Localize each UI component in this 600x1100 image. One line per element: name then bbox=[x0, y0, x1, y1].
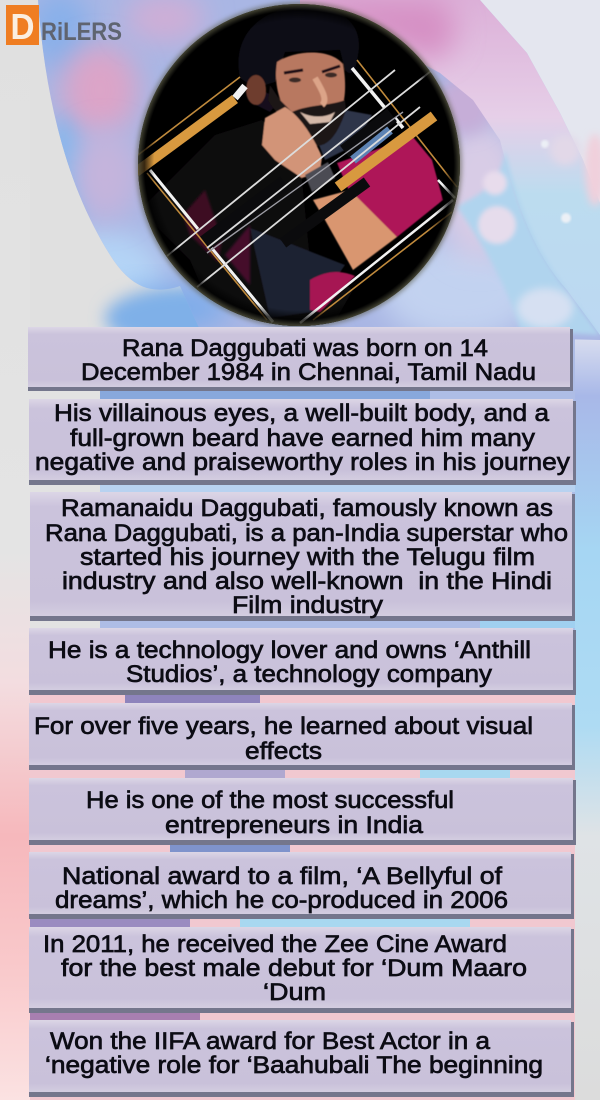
text: iifa award bbox=[45, 1028, 543, 1079]
panel: iifa award bbox=[29, 1020, 574, 1097]
text: birth bbox=[81, 335, 536, 386]
blue strip bbox=[353, 130, 390, 160]
text: iifa award: Won the IIFA award for Best Actor in a bbox=[50, 1028, 490, 1055]
gold bars bbox=[136, 99, 434, 187]
text: looks: His villainous eyes, a well-built body, and a bbox=[54, 400, 549, 427]
text: looks bbox=[35, 400, 571, 476]
hand bbox=[262, 107, 322, 178]
panel: career bbox=[30, 492, 575, 621]
text: career: Rana Daggubati, is a pan-India superstar who bbox=[45, 520, 568, 547]
text: technology: Studios’, a technology company bbox=[126, 661, 493, 688]
text: visual effects: For over five years, he learned about visual bbox=[34, 713, 533, 740]
text: birth: Rana Daggubati was born on 14 bbox=[122, 335, 488, 362]
text: zee cine award bbox=[43, 931, 527, 1006]
logo bbox=[6, 5, 122, 47]
text: visual effects bbox=[34, 713, 533, 765]
black bars bbox=[205, 115, 392, 243]
panel: visual effects bbox=[29, 703, 575, 770]
frame white lines bbox=[150, 68, 455, 323]
forearm bbox=[313, 190, 397, 270]
text: national award: National award to a film, ‘A Bellyful of bbox=[62, 863, 502, 890]
panel: looks bbox=[29, 399, 576, 485]
text: career: started his journey with the Telugu film bbox=[80, 544, 535, 571]
thin diagonal lines bbox=[167, 70, 431, 287]
ear bbox=[246, 75, 266, 105]
text: birth: December 1984 in Chennai, Tamil Nadu bbox=[81, 359, 536, 386]
text: career: Ramanaidu Daggubati, famously known as bbox=[61, 495, 553, 522]
text: looks: negative and praiseworthy roles in his journey bbox=[35, 449, 571, 476]
panel: national award bbox=[29, 852, 574, 919]
jacket bbox=[140, 120, 353, 330]
text: entrepreneur: He is one of the most successful bbox=[86, 787, 454, 814]
panel: entrepreneur bbox=[29, 778, 576, 845]
shirt bbox=[337, 137, 443, 237]
frame gold lines bbox=[138, 60, 457, 320]
text: iifa award: ‘negative role for ‘Baahubali The beginning bbox=[45, 1052, 543, 1079]
text: career: Film industry bbox=[232, 592, 384, 619]
text: technology bbox=[48, 637, 531, 688]
text: national award bbox=[55, 863, 508, 914]
neck bbox=[256, 92, 274, 112]
blue glow under the blob bbox=[105, 286, 275, 350]
text: entrepreneur bbox=[86, 787, 454, 839]
text: zee cine award: for the best male debut for ‘Dum Maaro bbox=[61, 955, 527, 982]
logo mark: orange D: D bbox=[10, 6, 34, 47]
panel: zee cine award bbox=[29, 927, 574, 1013]
face bbox=[275, 52, 346, 112]
logo wordmark: RiLERS bbox=[41, 18, 122, 46]
text: looks: full-grown beard have earned him many bbox=[70, 425, 536, 452]
text: career: industry and also well-known in the Hindi bbox=[62, 568, 552, 595]
panel: technology bbox=[29, 628, 576, 695]
text: technology: He is a technology lover and owns ‘Anthill bbox=[48, 637, 531, 664]
text: career bbox=[45, 495, 568, 619]
text: entrepreneur: entrepreneurs in India bbox=[165, 812, 423, 839]
text: national award: dreams’, which he co-produced in 2006 bbox=[55, 887, 508, 914]
panel: birth bbox=[28, 327, 573, 391]
hair bbox=[238, 6, 359, 88]
collar bbox=[315, 110, 372, 160]
text: zee cine award: In 2011, he received the Zee Cine Award bbox=[43, 931, 507, 958]
text: visual effects: effects bbox=[245, 738, 322, 765]
upper-right ribbon bbox=[300, 0, 600, 335]
watch bbox=[305, 162, 335, 192]
text: zee cine award: ‘Dum bbox=[263, 979, 326, 1006]
portrait bbox=[136, 2, 462, 330]
